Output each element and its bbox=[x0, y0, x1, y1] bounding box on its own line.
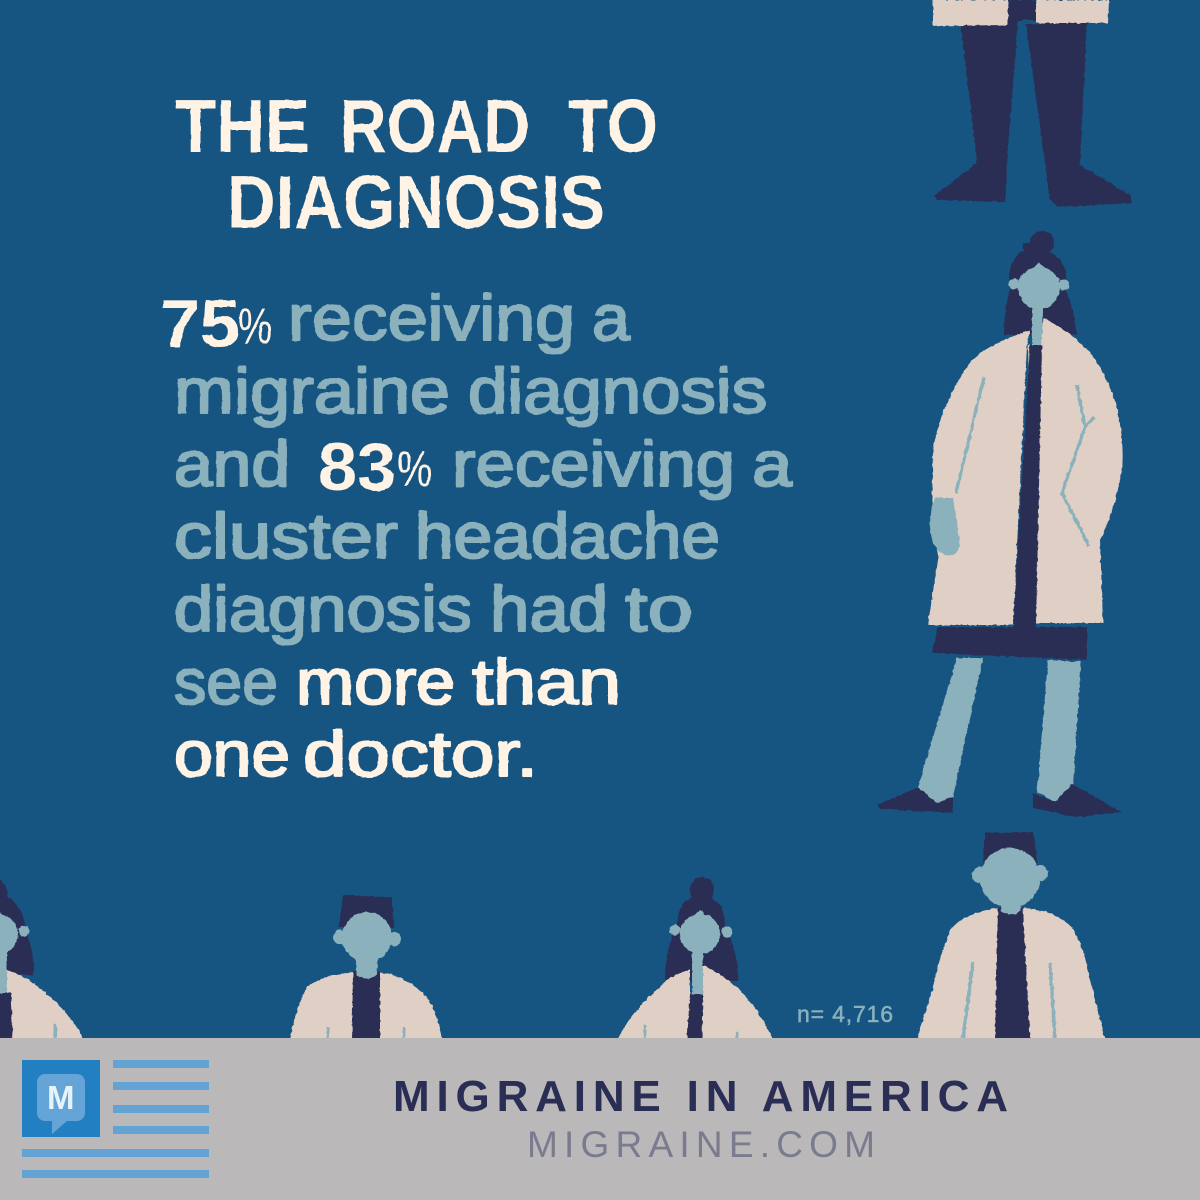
body text: diagnosis statistic: diagnosis bbox=[468, 355, 767, 427]
shoes bbox=[878, 784, 1122, 817]
speech bubble bbox=[37, 1074, 85, 1134]
figure: doctor bottom right bbox=[917, 832, 1105, 1040]
hand bbox=[930, 498, 960, 556]
title: THE bbox=[175, 84, 310, 168]
body text: diagnosis statistic: one bbox=[174, 718, 290, 790]
body text: diagnosis statistic: receiving bbox=[452, 428, 735, 500]
footer band bbox=[0, 1038, 1200, 1200]
body text: diagnosis statistic: and bbox=[174, 428, 290, 500]
footer website: MIGRAINE.COM bbox=[527, 1124, 875, 1165]
figure: woman doctor bottom centre bbox=[617, 877, 773, 1040]
figure: woman doctor cropped at left edge bbox=[0, 878, 84, 1040]
hair bbox=[1004, 231, 1077, 335]
body text: diagnosis statistic: diagnosis bbox=[174, 573, 472, 645]
stat: 83% bbox=[318, 429, 432, 505]
logo square bbox=[22, 1060, 100, 1137]
body text: diagnosis statistic: more bbox=[296, 646, 455, 718]
body text: diagnosis statistic: to bbox=[625, 573, 693, 645]
body text: diagnosis statistic: receiving bbox=[288, 282, 575, 354]
coat stripe and dress bbox=[932, 345, 1087, 660]
body text: diagnosis statistic: than bbox=[472, 646, 621, 718]
coat bbox=[928, 318, 1123, 625]
footer title: MIGRAINE IN AMERICA bbox=[393, 1072, 1008, 1121]
stat: 75%: 75 bbox=[160, 286, 240, 362]
body text: diagnosis statistic: cluster bbox=[174, 500, 398, 572]
sample size note: n= 4,716 bbox=[797, 1001, 893, 1027]
body text: diagnosis statistic: had bbox=[490, 573, 608, 645]
head and neck bbox=[1008, 263, 1070, 346]
figure: cropped doctor legs at top bbox=[933, 0, 1132, 207]
body text: diagnosis statistic: migraine bbox=[174, 355, 450, 427]
body text: diagnosis statistic: doctor. bbox=[303, 718, 538, 790]
body text: diagnosis statistic: headache bbox=[415, 500, 720, 572]
stat: 83%: 83 bbox=[318, 429, 396, 505]
body text: diagnosis statistic: see bbox=[174, 646, 278, 718]
figure: doctor bottom centre-left bbox=[290, 895, 442, 1040]
title: DIAGNOSIS bbox=[227, 160, 605, 244]
title bbox=[175, 84, 658, 244]
coat seams bbox=[956, 377, 1094, 546]
body text: diagnosis statistic: a bbox=[752, 428, 792, 500]
stat: 75%: % bbox=[238, 298, 272, 354]
title: ROAD bbox=[340, 84, 530, 168]
body text: diagnosis statistic bbox=[160, 282, 792, 790]
figure: standing doctor with bun bbox=[878, 231, 1123, 817]
stat: 75% bbox=[160, 286, 272, 362]
body text: diagnosis statistic: a bbox=[592, 282, 630, 354]
logo letter: M bbox=[47, 1079, 74, 1116]
flag stripes bbox=[22, 1060, 209, 1178]
title: TO bbox=[568, 84, 658, 168]
stat: 83%: % bbox=[397, 441, 432, 497]
legs bbox=[918, 658, 1081, 803]
logo: flag with M speech bubble bbox=[22, 1060, 209, 1178]
